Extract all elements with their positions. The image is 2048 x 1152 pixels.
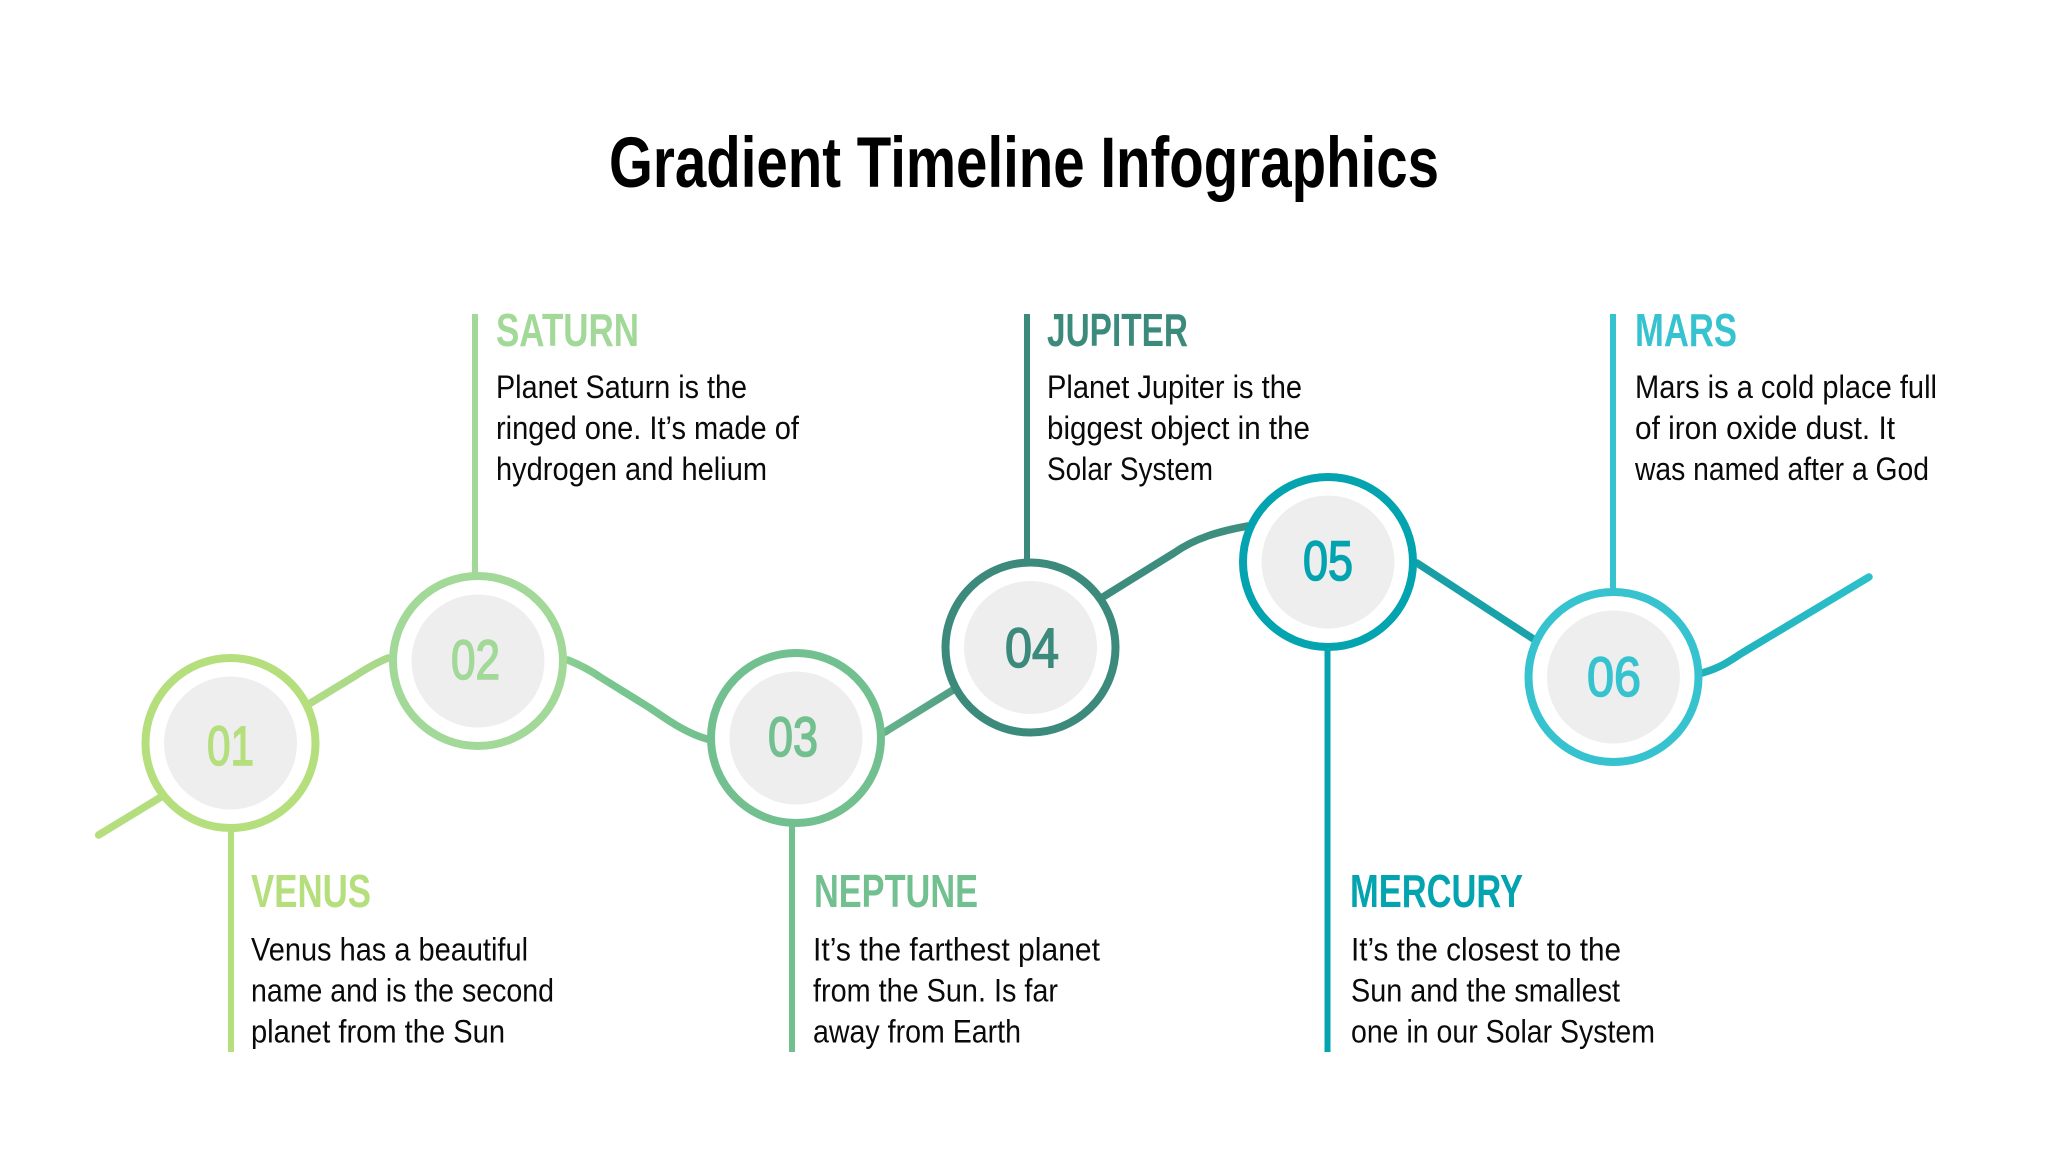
text: Neptune description: It’s the farthest planet	[813, 932, 1100, 968]
text: Neptune description: from the Sun. Is far	[813, 972, 1058, 1008]
milestone 06: Mars	[1528, 304, 1937, 762]
heading: Neptune: NEPTUNE	[814, 865, 978, 917]
node 02: 02	[451, 628, 500, 691]
text: Neptune description	[813, 932, 1100, 1050]
text: Venus description: Venus has a beautiful	[251, 932, 528, 968]
node 05	[1243, 477, 1413, 647]
text: Neptune description: away from Earth	[813, 1014, 1021, 1050]
text: Mars description: was named after a God	[1634, 451, 1929, 487]
connector line 01	[228, 825, 234, 1052]
heading: Saturn: SATURN	[496, 304, 639, 356]
text: Mercury description	[1351, 932, 1655, 1050]
text: Venus description: planet from the Sun	[251, 1014, 505, 1050]
node 03	[711, 653, 881, 823]
connector line 03	[789, 820, 795, 1052]
node 05: 05	[1303, 529, 1353, 592]
text: Mars description: Mars is a cold place full	[1635, 369, 1937, 405]
timeline curve	[99, 526, 1869, 835]
connector line 04	[1024, 314, 1030, 566]
text: Mars description: of iron oxide dust. It	[1635, 410, 1895, 446]
milestone 05: Mercury	[1243, 477, 1655, 1052]
node 02	[393, 576, 563, 746]
text: Mercury description: Sun and the smallest	[1351, 972, 1620, 1008]
milestone 03: Neptune	[711, 653, 1100, 1052]
text: Jupiter description: Planet Jupiter is the	[1047, 369, 1302, 405]
title: Gradient Timeline Infographics	[609, 124, 1439, 203]
connector line 02	[472, 314, 478, 580]
node 03: 03	[768, 705, 818, 768]
text: Venus description: name and is the second	[251, 972, 554, 1008]
connector line 06	[1610, 314, 1616, 596]
heading: Mars: MARS	[1635, 304, 1737, 356]
text: Saturn description: Planet Saturn is the	[496, 369, 747, 405]
node 06	[1528, 592, 1698, 762]
node 01	[146, 658, 316, 828]
heading: Jupiter: JUPITER	[1047, 304, 1188, 356]
milestone 02: Saturn	[393, 304, 799, 746]
text: Jupiter description: biggest object in the	[1047, 410, 1310, 446]
node 06: 06	[1587, 645, 1641, 708]
text: Venus description	[251, 932, 554, 1050]
text: Mercury description: It’s the closest to the	[1351, 932, 1621, 968]
text: Saturn description	[496, 369, 799, 487]
connector line 05	[1324, 640, 1330, 1052]
node 04: 04	[1005, 616, 1059, 679]
node 01: 01	[207, 714, 254, 777]
text: Saturn description: hydrogen and helium	[496, 451, 767, 487]
heading: Venus: VENUS	[251, 865, 371, 917]
milestone 01: Venus	[146, 658, 554, 1052]
text: Jupiter description: Solar System	[1047, 451, 1213, 487]
text: Saturn description: ringed one. It’s made of	[496, 410, 799, 446]
node 04	[946, 562, 1116, 732]
text: Mars description	[1634, 369, 1937, 487]
milestone 04: Jupiter	[946, 304, 1310, 732]
text: Jupiter description	[1047, 369, 1310, 487]
text: Mercury description: one in our Solar System	[1351, 1014, 1655, 1050]
heading: Mercury: MERCURY	[1350, 865, 1523, 917]
